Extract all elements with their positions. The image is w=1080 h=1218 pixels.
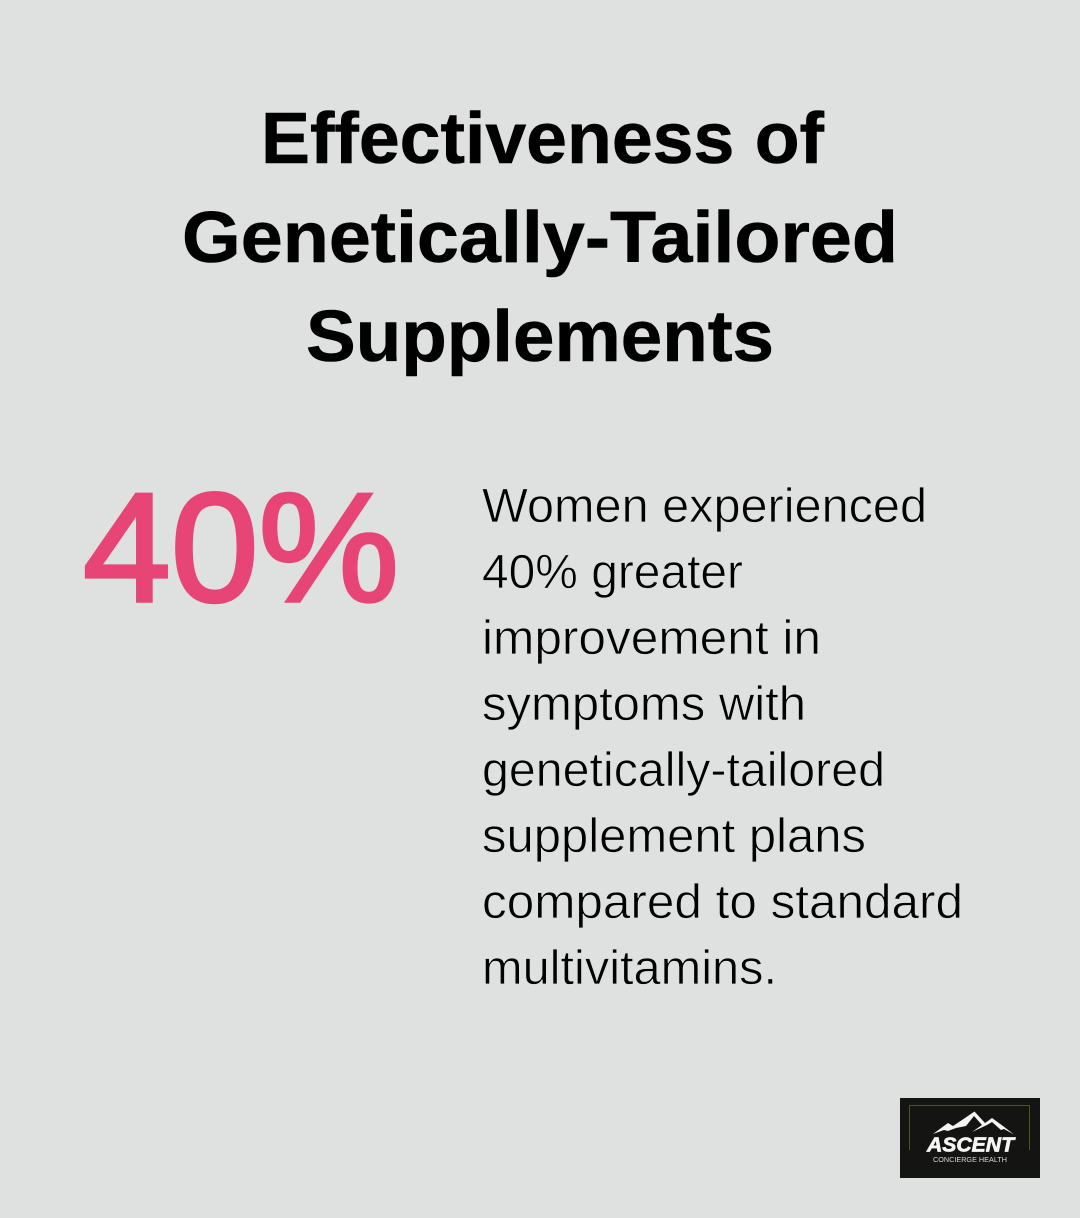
title: Genetically-Tailored <box>182 198 898 278</box>
description text: genetically-tailored <box>482 744 885 797</box>
description text: compared to standard <box>482 876 963 929</box>
description text: multivitamins. <box>482 942 777 995</box>
description text: 40% greater <box>482 546 743 599</box>
description text: symptoms with <box>482 678 806 731</box>
title: Supplements <box>306 297 774 377</box>
logo wordmark: ASCENT <box>926 1134 1016 1156</box>
description text: improvement in <box>482 612 821 665</box>
logo: Ascent Concierge Health <box>900 1098 1040 1178</box>
big statistic: 40%: 40% <box>83 461 399 634</box>
description text: Women experienced <box>482 480 927 533</box>
description text: supplement plans <box>482 810 866 863</box>
description text <box>482 480 963 995</box>
icon: mountains <box>933 1112 1014 1134</box>
title <box>182 99 898 377</box>
title: Effectiveness of <box>261 99 825 179</box>
logo tagline: CONCIERGE HEALTH <box>933 1157 1007 1164</box>
